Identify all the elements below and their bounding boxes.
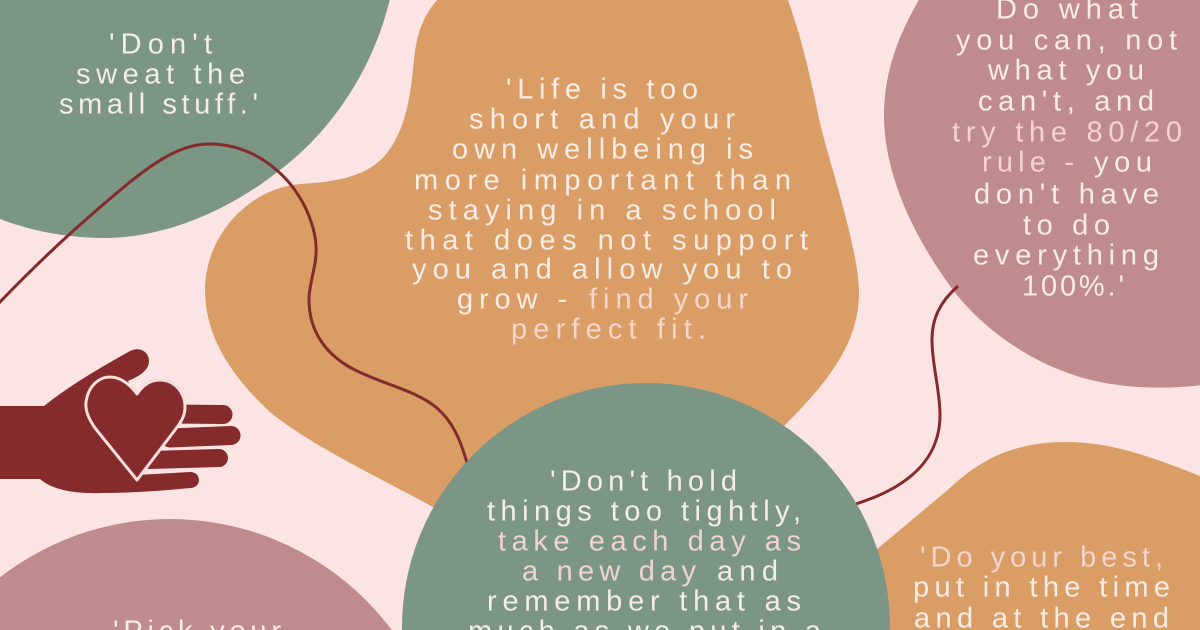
text: life is too short: more important than (414, 164, 791, 196)
text: do what you can: 100%.' (1022, 270, 1124, 302)
text: do what you can: try the 80/20 (952, 116, 1182, 148)
panel: bottom-left rose circle (0, 519, 447, 630)
panel: top-left green circle (0, 0, 392, 238)
text: do your best (913, 542, 1170, 630)
text: don't sweat the small stuff (59, 28, 258, 120)
text: do what you can (952, 0, 1182, 302)
fingers (150, 414, 231, 460)
text: do what you can: can't, and (978, 86, 1154, 118)
text: life is too short: you and allow you to (412, 254, 792, 286)
connector: curved line from bottom green circle to rose circle (850, 286, 958, 506)
panel: bottom green circle (402, 383, 890, 630)
text: do what you can: to do (1023, 210, 1110, 242)
text: do what you can: everything (973, 240, 1159, 272)
hand palm and thumb (0, 349, 199, 493)
text: don't sweat the small stuff: 'Don't (109, 28, 212, 60)
text: life is too short: own wellbeing is (452, 134, 753, 166)
icon: hand holding a heart (0, 349, 231, 493)
text: don't sweat the small stuff: small stuff.' (59, 88, 258, 120)
text: life is too short: grow - (457, 284, 567, 316)
text: don't hold things too tightly: a new day (522, 556, 696, 588)
text: do what you can: you can, not (956, 24, 1177, 56)
text: don't hold things too tightly: 'Don't hold (550, 466, 737, 498)
panel: top-right rose circle (884, 0, 1200, 388)
text: do your best: put in the time (913, 572, 1170, 604)
text: life is too short: staying in a school (428, 194, 776, 226)
text: life is too short: short and your (469, 104, 735, 136)
text: don't hold things too tightly: things too tightly, (487, 496, 801, 528)
text: don't sweat the small stuff: sweat the (76, 58, 245, 90)
text: life is too short (405, 74, 808, 346)
connector: curved line from left through central blob (0, 144, 469, 470)
text: do what you can: what you (987, 54, 1144, 86)
panel: central orange blob (205, 0, 859, 507)
text: don't hold things too tightly (468, 466, 822, 630)
text: don't hold things too tightly: take each day as (498, 526, 801, 558)
heart (86, 377, 185, 480)
panel: bottom-right orange blob (870, 442, 1200, 630)
text: do what you can: rule - (982, 146, 1074, 178)
text: life is too short: 'Life is too (506, 74, 698, 106)
text: life is too short: find your (589, 284, 748, 316)
text: don't hold things too tightly: remember that as (487, 586, 801, 618)
text: life is too short: that does not support (405, 224, 808, 256)
text: do what you can: you (1094, 146, 1152, 178)
text: life is too short: perfect fit. (511, 314, 706, 346)
text: do your best: 'Do your best, (920, 542, 1163, 574)
text: do what you can: don't have (974, 178, 1159, 210)
text: don't hold things too tightly: and (717, 556, 778, 588)
